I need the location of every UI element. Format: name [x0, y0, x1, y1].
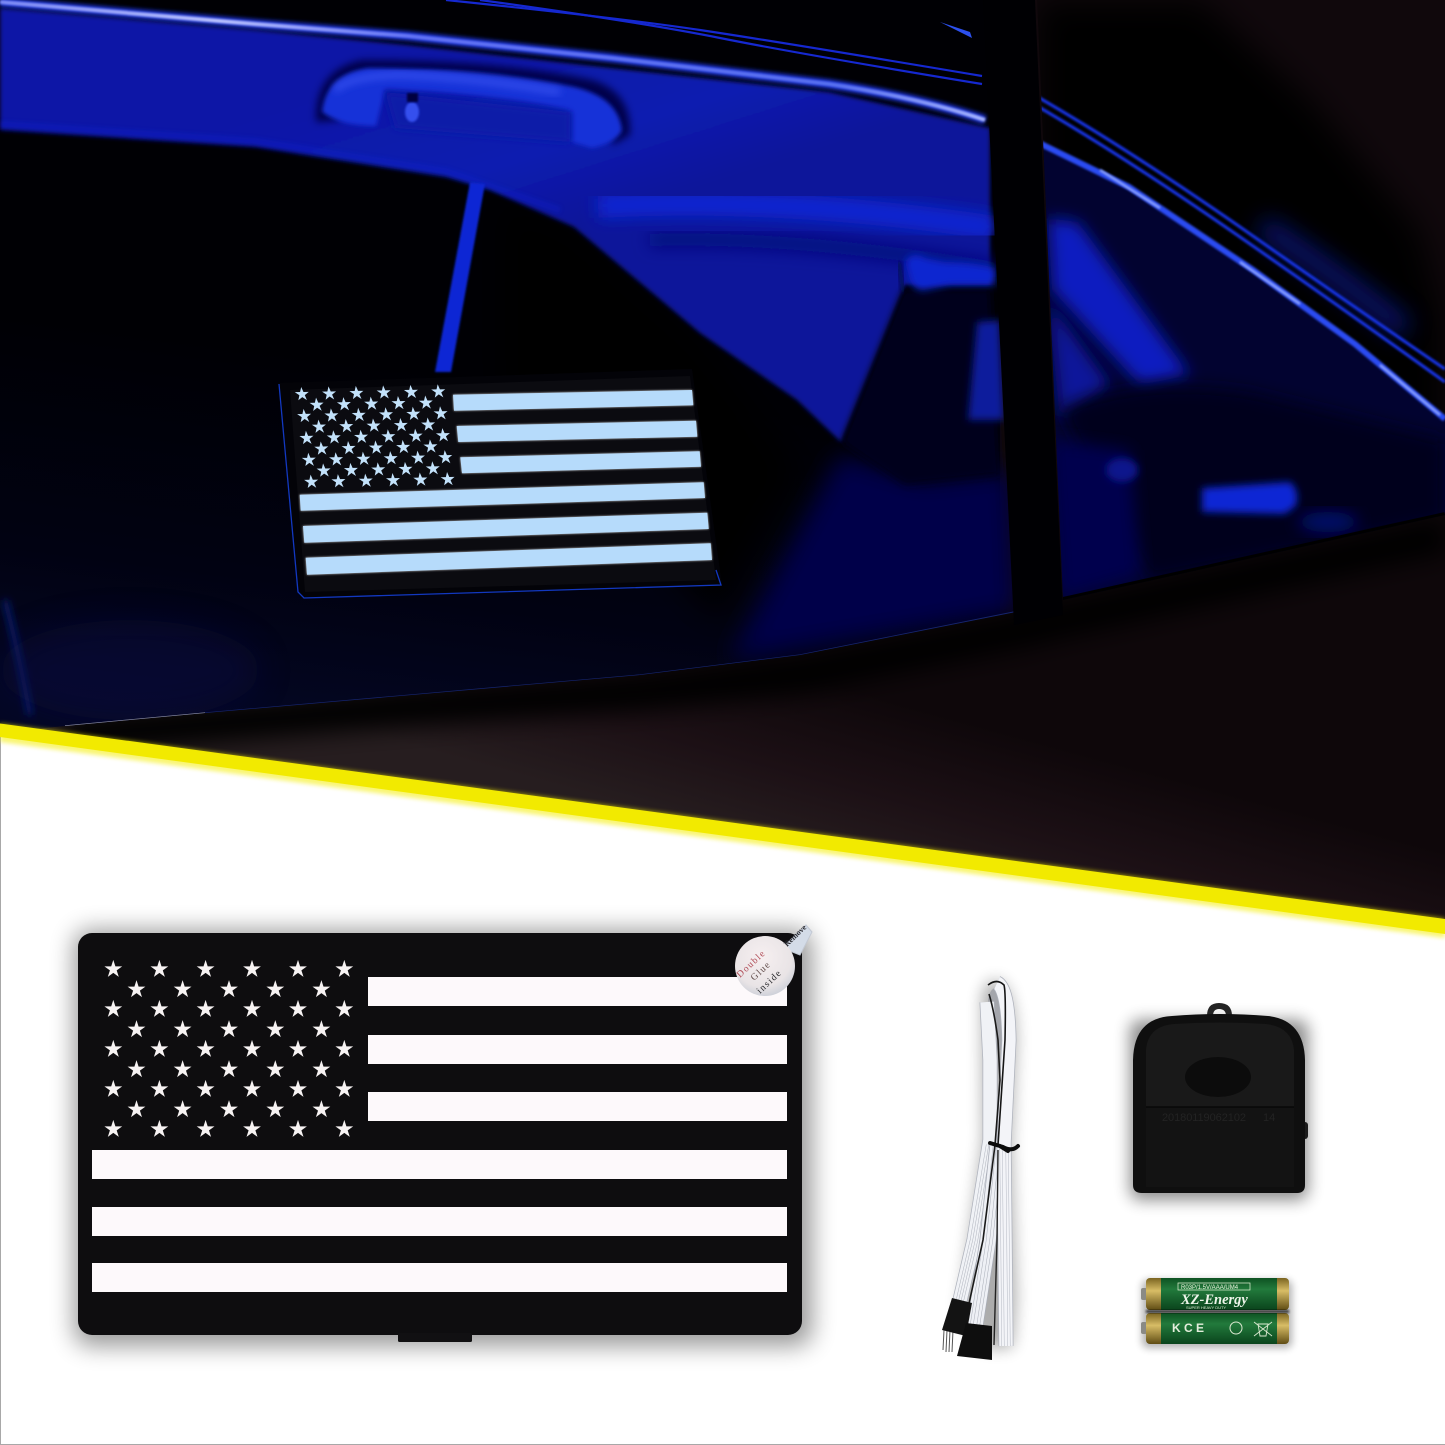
- lit stars: [294, 384, 455, 488]
- door pillar: [983, 0, 1063, 625]
- handle pivot: [405, 102, 419, 122]
- sill highlight: [65, 713, 205, 726]
- grab handle: [322, 68, 622, 148]
- ribbon right: [997, 983, 1009, 1346]
- seat blue strip: [968, 320, 1004, 420]
- tab text remove: Remove: [782, 923, 809, 948]
- lower interior navy glow: [0, 620, 260, 720]
- connector one: [942, 1298, 972, 1336]
- window strut: [435, 182, 485, 372]
- top battery label: [1161, 1278, 1277, 1310]
- box moulded number: 14: [1263, 1112, 1275, 1124]
- grab handle highlight: [335, 75, 560, 92]
- double glue sticker: [735, 923, 812, 996]
- yellow band: [0, 724, 1445, 934]
- bottom battery label: [1161, 1313, 1277, 1344]
- box body: [1133, 1014, 1305, 1193]
- bottom battery casing: [1146, 1313, 1289, 1344]
- corner glint: [940, 22, 972, 38]
- ribbon far left: [960, 1002, 990, 1300]
- yellow diagonal divider: [0, 723, 1445, 938]
- sill black line: [1063, 515, 1445, 600]
- connector one pins: [943, 1330, 953, 1352]
- sticker text double: Double: [735, 948, 768, 980]
- hand shadow: [899, 262, 903, 292]
- ribbon middle: [975, 1145, 998, 1325]
- bright roof line: [0, 2, 985, 120]
- car door body: [39, 717, 1401, 910]
- left edge glow: [5, 600, 30, 715]
- sticker text inside: inside: [755, 968, 784, 996]
- bright roof line core: [0, 2, 985, 120]
- sign plate: [78, 933, 802, 1335]
- panel: night car photo: [0, 0, 1445, 930]
- ribbon black wire lower: [994, 1150, 998, 1345]
- panel: right window: [1036, 0, 1445, 600]
- sill shadow: [65, 535, 1445, 736]
- grab handle shadow: [316, 60, 630, 145]
- white stars: [104, 960, 353, 1137]
- window frame lower lip: [0, 124, 560, 210]
- box shadow: [1130, 1020, 1308, 1200]
- panel: ribbon cable: [942, 980, 1018, 1360]
- seat dark shape: [1060, 386, 1445, 580]
- blue door panel: [0, 8, 990, 442]
- car exterior background: [38, 0, 1445, 728]
- bright window line highlight: [1100, 170, 1440, 415]
- hand reflection: [905, 255, 995, 290]
- voltage label box: [1178, 1283, 1250, 1290]
- ribbon black wire inner: [968, 994, 1000, 1308]
- bottom tab: [398, 1333, 472, 1342]
- panel: illuminated flag on window: [278, 369, 722, 598]
- band shadow: [650, 240, 995, 268]
- grab handle inner: [566, 110, 572, 135]
- trim line one: [1036, 96, 1445, 369]
- side button: [1302, 1122, 1308, 1139]
- box lower face: [1146, 1107, 1294, 1187]
- box divider: [1146, 1106, 1294, 1108]
- ribbon black wire outer: [988, 982, 1005, 1145]
- box top face: [1146, 1022, 1294, 1107]
- certification marks: K C E: [1172, 1321, 1204, 1335]
- roof shadow: [1038, 2, 1444, 412]
- seat blue lower area: [730, 455, 1016, 660]
- panel: left window interior: [0, 0, 1016, 740]
- upper double trim lines: [446, 0, 982, 76]
- handle pivot hole: [407, 93, 418, 102]
- panel: AAA batteries: [1141, 1278, 1292, 1348]
- roof blue glow: [1262, 226, 1405, 330]
- door handle glow: [1202, 482, 1297, 514]
- sticker text glue: Glue: [749, 960, 773, 983]
- brand text: XZ-Energy: [1180, 1292, 1248, 1308]
- lit stripes: [300, 390, 712, 575]
- roof black strip: [446, 0, 990, 125]
- reflection diagonal: [1048, 218, 1190, 385]
- recycle mark: [1230, 1322, 1242, 1334]
- interior dark base: [0, 0, 1000, 740]
- trim line two: [1037, 106, 1445, 382]
- top battery casing: [1146, 1278, 1289, 1310]
- lower sill line: [65, 612, 1014, 726]
- glow lower right: [1298, 512, 1358, 532]
- bright window line: [1039, 143, 1445, 419]
- lit stripes glow: [300, 390, 712, 575]
- plate lit edges: [279, 384, 721, 598]
- page edge line: [0, 735, 1445, 1444]
- flag sign plate: [278, 369, 722, 598]
- loop opening: [988, 988, 1003, 1050]
- battery seam: [1146, 1310, 1289, 1313]
- duty text: SUPER HEAVY DUTY: [1186, 1305, 1226, 1310]
- panel: battery box: [1130, 1003, 1308, 1200]
- bottom battery nub: [1141, 1322, 1147, 1334]
- yellow band glow: [0, 723, 1445, 938]
- hanging loop: [1207, 1003, 1232, 1016]
- headrest dark shape: [842, 290, 1000, 485]
- top battery: [1141, 1278, 1289, 1310]
- white stripes: [92, 977, 787, 1292]
- handle slit: [562, 108, 564, 138]
- rear interior shadow: [690, 471, 768, 602]
- top battery nub: [1141, 1288, 1147, 1300]
- cable tie: [990, 1143, 1018, 1151]
- lower glass dim: [1050, 440, 1140, 598]
- small glow: [1106, 458, 1138, 482]
- bottom battery: [1141, 1313, 1289, 1344]
- panel: flag sign product: [74, 923, 812, 1346]
- lower left dim area: [1048, 300, 1110, 420]
- box oval recess: [1185, 1057, 1251, 1097]
- box moulded code: 20180119062102: [1162, 1112, 1246, 1124]
- voltage text: R03P/1.5V/AAA/UM4: [1181, 1285, 1239, 1291]
- cable shadow: [960, 980, 1016, 1348]
- sign drop shadow: [74, 930, 812, 1346]
- sticker disc: [735, 936, 795, 996]
- disposal mark: [1254, 1322, 1272, 1336]
- sticker pull tab: [782, 925, 812, 955]
- plate inner shade: [290, 376, 716, 592]
- connector two: [957, 1323, 992, 1360]
- battery shadow: [1142, 1280, 1292, 1348]
- window glass: [1039, 143, 1445, 600]
- upper trim line two: [480, 0, 982, 84]
- reflection band: [598, 204, 995, 228]
